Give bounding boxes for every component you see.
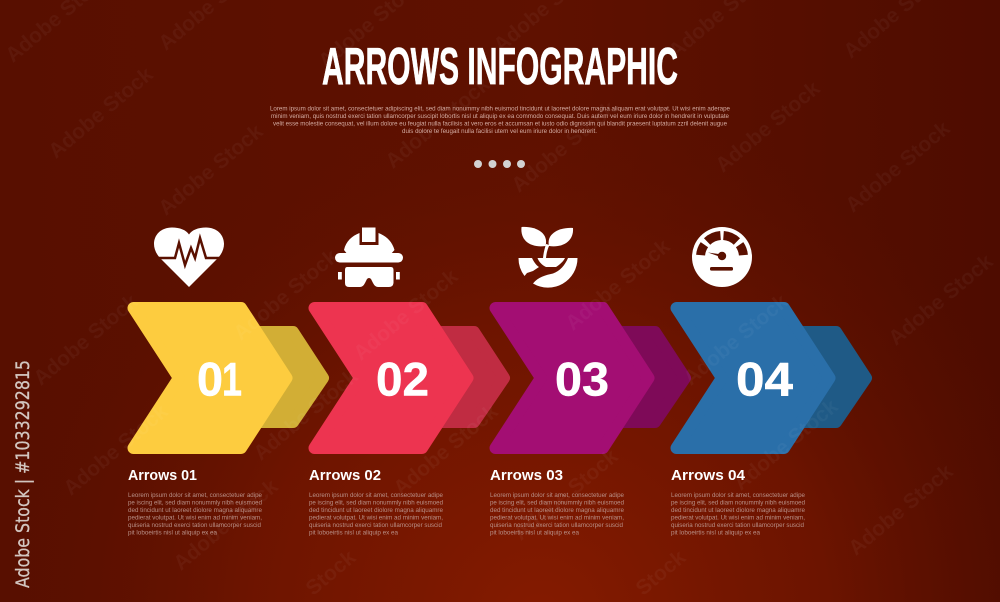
paragraph: arrows 02: quiseria nostrud exerci tation ullamcorper suscid (309, 522, 442, 529)
paragraph: arrows 02: pe iscing elit, sed diam nonummly nibh euismoed (309, 500, 443, 506)
watermarks: Adobe Stock (389, 400, 503, 500)
paragraph: arrows 04: ded tincidunt ut laoreet diolore magna aliquamre (671, 507, 805, 514)
paragraph: arrows 03: ded tincidunt ut laoreet diolore magna aliquamre (490, 507, 624, 514)
arrow 02 (314, 308, 504, 448)
watermarks: Adobe Stock (561, 235, 675, 335)
arrow 03 (496, 308, 685, 448)
paragraph: arrows 02: ded tincidunt ut laoreet diolore magna aliquamre (309, 507, 443, 514)
watermarks: Adobe Stock (509, 445, 623, 545)
back arrow 03 (602, 332, 685, 422)
title: ARROWS INFOGRAPHIC (322, 38, 678, 96)
paragraph: arrows 01: Leorem ipsum dolor sit amet, consectetuer adipe (128, 492, 262, 499)
watermarks: Adobe Stock (29, 290, 143, 390)
intro text block: minim veniam, quis nostrud exerci tation ullamcorper suscipit lobortis nisl ut aliquip ex ea commodo consequat. Duis autem vel eum iriure dolor in hendrerit in vulputate (271, 113, 729, 120)
watermarks: Adobe Stock (229, 245, 343, 345)
paragraph: arrows 01: ded tincidunt ut laoreet diolore magna aliquamre (128, 507, 262, 514)
watermarks: Adobe Stock (711, 77, 825, 177)
watermarks: Adobe Stock (349, 265, 463, 365)
intro text block (270, 106, 730, 135)
paragraph: arrows 02: pedierat volutpat. Ut wisi enim ad minim veniam, (309, 514, 443, 522)
paragraph: arrows 01: pe iscing elit, sed diam nonummly nibh euismoed (128, 500, 262, 506)
icon: helmet and goggles (335, 228, 403, 287)
paragraph: arrows 04: pit loboeirtis nisl ut aliquip ex ea (671, 530, 760, 536)
watermarks: Adobe Stock (844, 460, 958, 560)
heading: arrows 04: Arrows 04 (671, 468, 745, 484)
paragraph: arrows 03 (490, 492, 624, 536)
arrow 01 (134, 308, 323, 448)
stock id side label: Adobe Stock | #1033292815 (12, 360, 34, 588)
watermarks: Adobe Stock (507, 97, 621, 197)
watermarks: Adobe Stock (679, 290, 793, 390)
paragraph: arrows 03: pedierat volutpat. Ut wisi enim ad minim veniam, (490, 514, 624, 522)
paragraph: arrows 04 (671, 492, 805, 536)
heading: arrows 03: Arrows 03 (490, 468, 563, 484)
paragraph: arrows 02: pit loboeirtis nisl ut aliquip ex ea (309, 530, 398, 536)
paragraph: arrows 03: pit loboeirtis nisl ut aliquip ex ea (490, 530, 579, 536)
intro text block: Lorem ipsum dolor sit amet, consectetuer adipiscing elit, sed diam nonummy nibh euismod tincidunt ut laoreet dolore magna aliquam erat volutpat. Ut wisi enim aderape (270, 106, 730, 112)
intro text block: velit esse molestie consequat, vel illum dolore eu feugiat nulla facilisis at vero eros et accumsan et iusto odio dignissim qui blandit praesent luptatum zzril delenit augue (273, 120, 727, 128)
icon: speedometer (692, 227, 752, 287)
watermarks: Adobe Stock (249, 365, 363, 465)
watermarks: Adobe Stock (169, 475, 283, 575)
intro text block: duis dolore te feugait nulla facilisi utem vel eum iriure dolor in hendrerit. (402, 128, 597, 135)
paragraph: arrows 01: pit loboeirtis nisl ut aliquip ex ea (128, 530, 217, 536)
paragraph: arrows 03: Leorem ipsum dolor sit amet, consectetuer adipe (490, 492, 624, 499)
paragraph: arrows 01 (128, 492, 262, 536)
number 01: 0 (197, 352, 223, 406)
front arrow 04 (676, 308, 830, 448)
number 03: 03 (555, 352, 609, 406)
paragraph: arrows 04: pedierat volutpat. Ut wisi enim ad minim veniam, (671, 514, 805, 522)
paragraph: arrows 01: quiseria nostrud exerci tation ullamcorper suscid (128, 522, 261, 529)
watermarks: Stock (632, 546, 690, 600)
paragraph: arrows 04: quiseria nostrud exerci tation ullamcorper suscid (671, 522, 804, 529)
heading: arrows 02: Arrows 02 (309, 468, 381, 484)
back arrow 04 (783, 332, 866, 422)
paragraph: arrows 04: pe iscing elit, sed diam nonummly nibh euismoed (671, 500, 805, 506)
back arrow 02 (421, 332, 504, 422)
icon: heart with pulse (154, 228, 224, 287)
watermarks: Stock (302, 546, 360, 600)
back arrow 01 (240, 332, 323, 422)
watermarks: Adobe Stock (884, 250, 998, 350)
watermarks: Adobe Stock (729, 395, 843, 495)
heading: arrows 01: Arrows 01 (128, 468, 197, 484)
arrow 04 (676, 308, 866, 448)
paragraph: arrows 02: Leorem ipsum dolor sit amet, consectetuer adipe (309, 492, 443, 499)
number 02: 02 (376, 352, 429, 406)
watermarks: Adobe Stock (381, 73, 495, 173)
number 01: 1 (222, 352, 242, 406)
front arrow 02 (314, 308, 468, 448)
text block: arrows 01 (128, 468, 262, 536)
front arrow 03 (496, 308, 648, 448)
number 04: 04 (736, 352, 793, 406)
watermarks: Adobe Stock (154, 120, 268, 220)
watermarks: Adobe Stock (59, 400, 173, 500)
number 01 (197, 352, 242, 406)
text block: arrows 02 (309, 468, 443, 536)
icon: plant in hand (518, 227, 578, 288)
paragraph: arrows 04: Leorem ipsum dolor sit amet, consectetuer adipe (671, 492, 805, 499)
paragraph: arrows 01: pedierat volutpat. Ut wisi enim ad minim veniam, (128, 514, 262, 522)
paragraph: arrows 03: quiseria nostrud exerci tation ullamcorper suscid (490, 522, 623, 529)
watermarks: Adobe Stock (841, 117, 955, 217)
paragraph: arrows 03: pe iscing elit, sed diam nonummly nibh euismoed (490, 500, 624, 506)
front arrow 01 (134, 308, 286, 448)
text block: arrows 03 (490, 468, 624, 536)
paragraph: arrows 02 (309, 492, 443, 536)
watermarks: Adobe Stock (44, 63, 158, 163)
pagination dots (474, 160, 525, 168)
text block: arrows 04 (671, 468, 805, 536)
